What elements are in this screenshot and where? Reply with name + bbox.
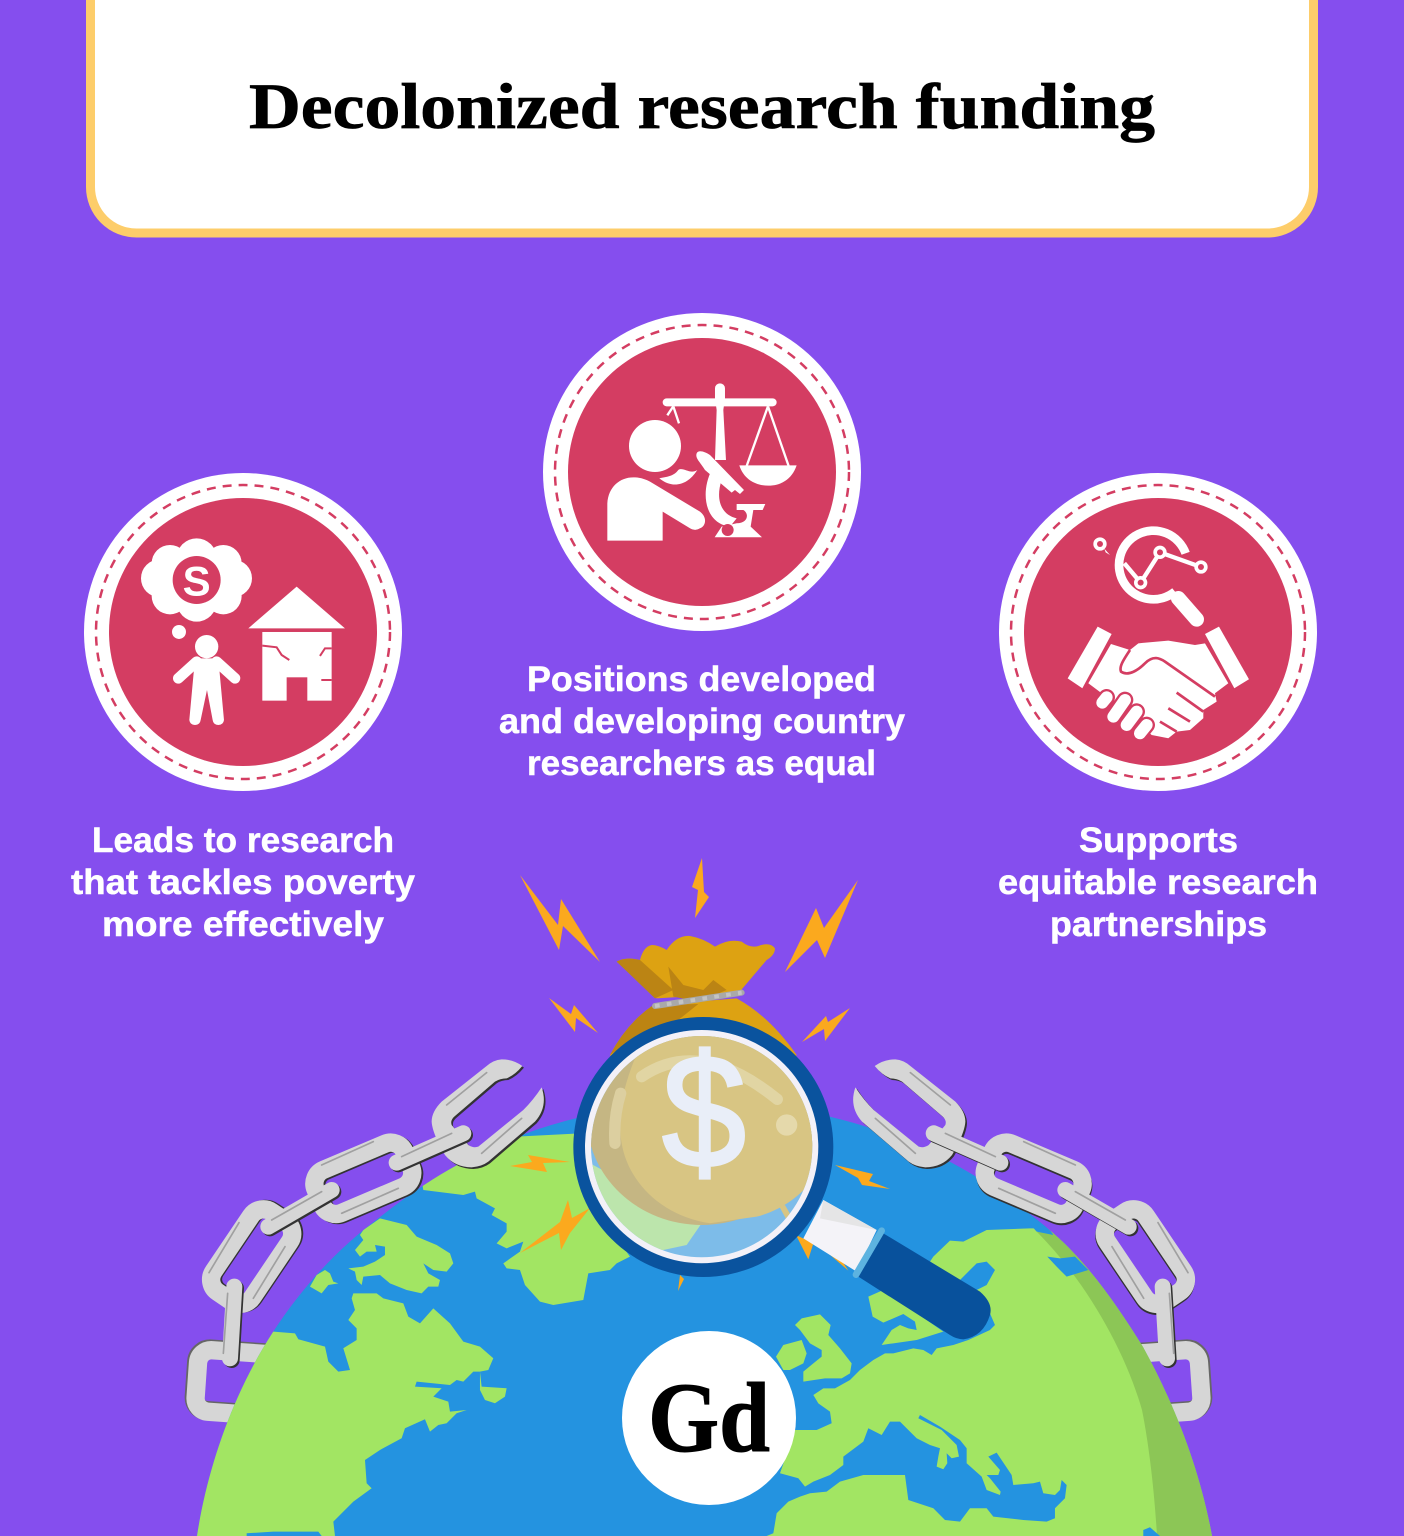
text: equal researchers: Positions developed [527,660,876,699]
text: equal researchers: and developing country [499,702,906,741]
icon: scientist, microscope and scales [607,383,797,541]
money bag [610,936,797,1097]
icon: magnifier chart over handshake [1068,531,1249,738]
logo: Gd: Gd [648,1362,770,1473]
text: partnerships: equitable research [998,863,1318,902]
icon: person thinking of money beside broken house: S [183,557,211,604]
text: poverty [71,821,416,944]
panel: poverty badge [84,473,402,791]
globe [197,1116,1212,1536]
land masses east [767,1228,1227,1536]
icon: person thinking of money beside broken house [141,538,345,725]
globe shaded rim [1037,1230,1212,1536]
left chain [205,1059,546,1360]
dollar sign: $ [662,1022,746,1202]
small bolts behind the handle [796,1235,848,1271]
magnifying glass [573,1008,991,1339]
broken link [433,1061,546,1169]
title card [90,0,1314,233]
right chain [853,1059,1192,1360]
logo: Gd [622,1331,796,1505]
title: Decolonized research funding [249,71,1155,143]
handle [803,1200,991,1339]
text: partnerships: partnerships [1050,905,1267,944]
rim ocean patches [1023,1217,1160,1536]
text: equal researchers: researchers as equal [527,744,876,783]
panel: partnerships badge [999,473,1317,791]
text: partnerships [998,821,1318,944]
land masses west [190,1133,630,1536]
text: poverty: more effectively [102,905,385,944]
text: equal researchers [499,660,906,783]
text: poverty: that tackles poverty [71,863,416,902]
lightning bolts [510,858,890,1291]
chain end links behind globe [193,1348,1204,1417]
panel: equal researchers badge [543,313,861,631]
lens [573,1008,833,1277]
text: poverty: Leads to research [92,821,394,860]
text: partnerships: Supports [1079,821,1238,860]
